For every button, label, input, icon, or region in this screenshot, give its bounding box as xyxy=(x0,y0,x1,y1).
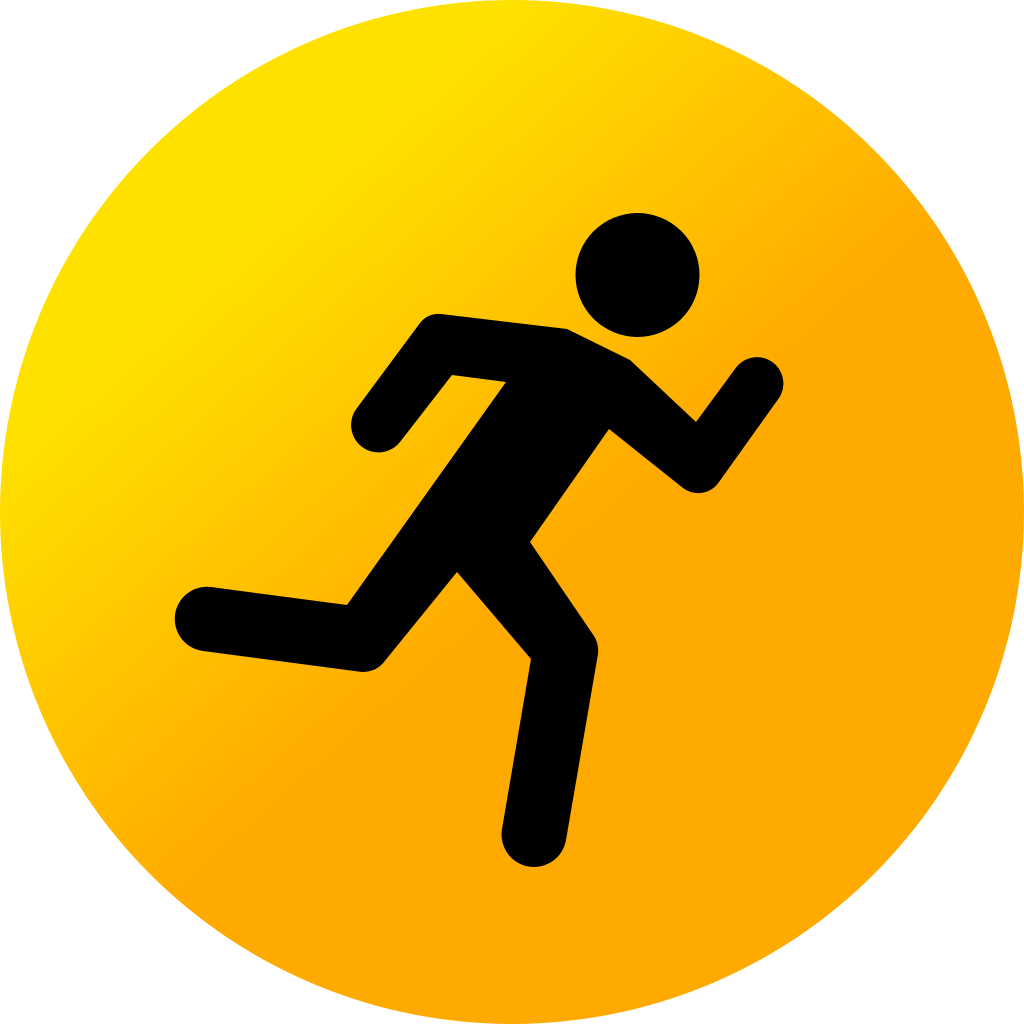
icon: running figure xyxy=(175,213,783,867)
runner body and limbs xyxy=(175,314,783,867)
runner head xyxy=(576,213,700,337)
